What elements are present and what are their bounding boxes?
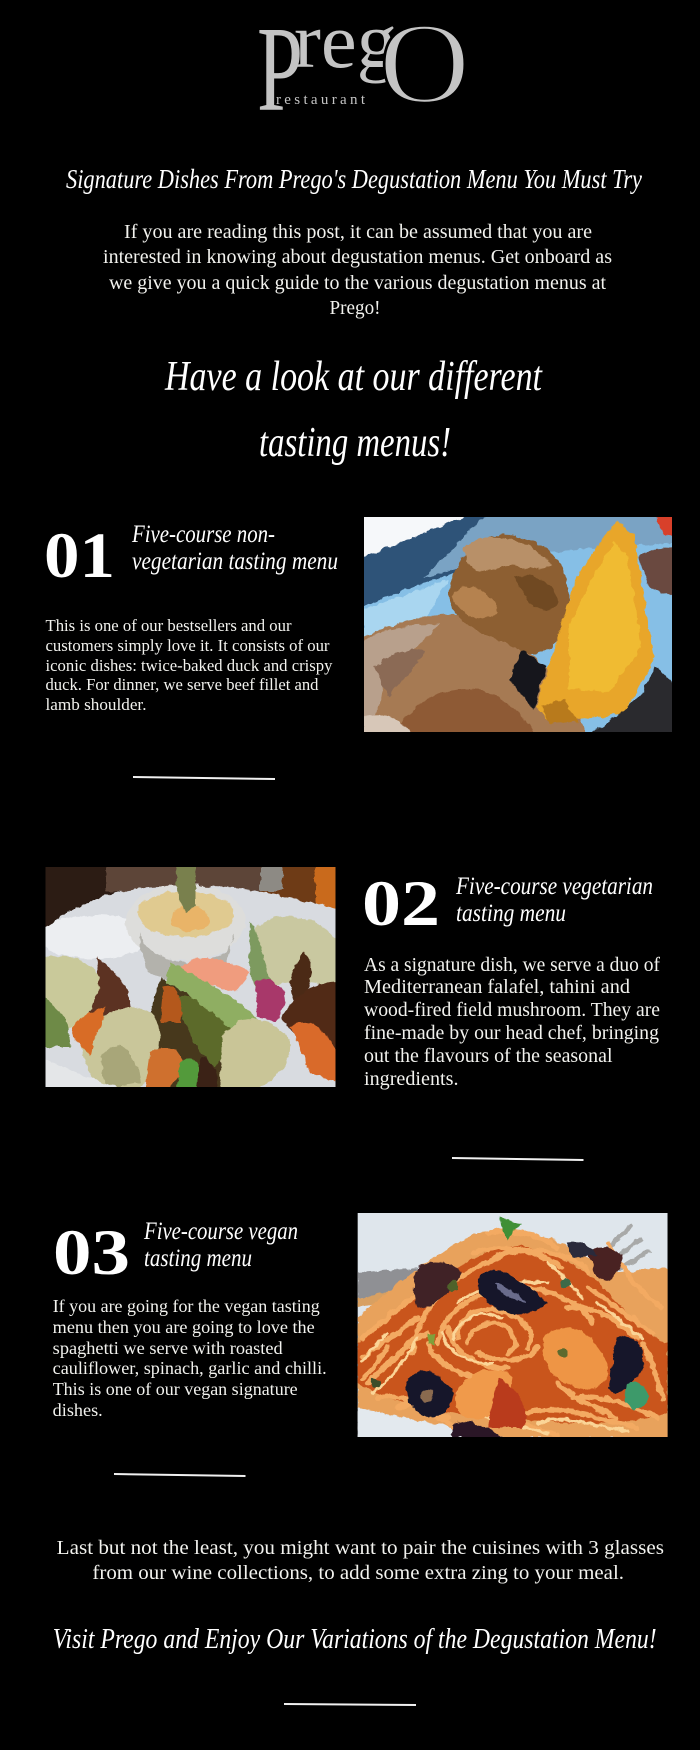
intro paragraph: Prego! (330, 297, 380, 319)
heading 02: tasting menu (456, 900, 566, 927)
intro paragraph: If you are reading this post, it can be assumed that you are (124, 221, 592, 243)
body text 02: fine-made by our head chef, bringing (364, 1023, 659, 1044)
heading: tasting menus (164, 354, 543, 466)
closing paragraph: Last but not the least, you might want to pair the cuisines with 3 glasses (57, 1537, 664, 1559)
divider bottom (284, 1704, 416, 1705)
heading 03: Five-course vegan (143, 1218, 298, 1245)
body text 02 (364, 955, 661, 1090)
closing paragraph: from our wine collections, to add some extra zing to your meal. (92, 1562, 624, 1584)
logo: Prego restaurant: O (379, 0, 470, 128)
logo: Prego restaurant: restaurant (276, 92, 366, 108)
heading 01: vegetarian tasting menu (132, 548, 338, 575)
body text 02: Mediterranean falafel, tahini and (364, 977, 630, 998)
logo: Prego restaurant (257, 0, 470, 137)
body text 03: dishes. (53, 1400, 103, 1420)
body text 01: This is one of our bestsellers and our (46, 616, 292, 635)
closing paragraph (57, 1537, 664, 1584)
body text 02: As a signature dish, we serve a duo of (364, 955, 661, 976)
intro paragraph: we give you a quick guide to the various degustation menus at (109, 272, 606, 294)
heading: tasting menus: Have a look at our different (164, 354, 543, 400)
number 02: 02 (362, 868, 440, 940)
body text 01: lamb shoulder. (46, 695, 146, 714)
intro paragraph: interested in knowing about degustation menus. Get onboard as (103, 246, 612, 268)
heading: tasting menus: tasting menus! (259, 420, 451, 466)
heading 01 (131, 521, 338, 575)
heading 02 (455, 873, 653, 927)
body text 01 (46, 616, 333, 714)
body text 02: ingredients. (364, 1069, 458, 1090)
heading 03 (143, 1218, 298, 1272)
number 01: 01 (44, 520, 115, 592)
photo: spaghetti with olives (358, 1213, 668, 1437)
photo: duck and polenta (364, 517, 672, 732)
body text 03: If you are going for the vegan tasting (53, 1296, 320, 1316)
divider 03 (114, 1474, 246, 1476)
body text 03: spaghetti we serve with roasted (53, 1338, 283, 1358)
body text 01: iconic dishes: twice-baked duck and crispy (46, 656, 333, 675)
body text 02: out the flavours of the seasonal (364, 1046, 613, 1067)
logo: Prego restaurant: P (257, 2, 303, 137)
panel: menu 02 (36, 857, 661, 1160)
intro paragraph (103, 221, 612, 319)
body text 01: duck. For dinner, we serve beef fillet and (46, 675, 319, 694)
panel: menu 01 (44, 507, 684, 779)
number 03: 03 (53, 1217, 130, 1289)
body text 03: cauliflower, spinach, garlic and chilli. (53, 1358, 327, 1378)
body text 03: menu then you are going to love the (53, 1317, 315, 1337)
panel: menu 03 (53, 1213, 678, 1476)
heading 03: tasting menu (144, 1245, 252, 1272)
body text 03 (53, 1296, 327, 1420)
photo: falafel salad (46, 867, 336, 1087)
heading 01: Five-course non- (131, 521, 275, 548)
body text 02: wood-fired field mushroom. They are (364, 1000, 660, 1021)
body text 01: customers simply love it. It consists of our (46, 636, 330, 655)
divider 02 (452, 1158, 584, 1160)
divider 01 (133, 777, 275, 779)
heading 02: Five-course vegetarian (455, 873, 653, 900)
body text 03: This is one of our vegan signature (53, 1379, 298, 1399)
